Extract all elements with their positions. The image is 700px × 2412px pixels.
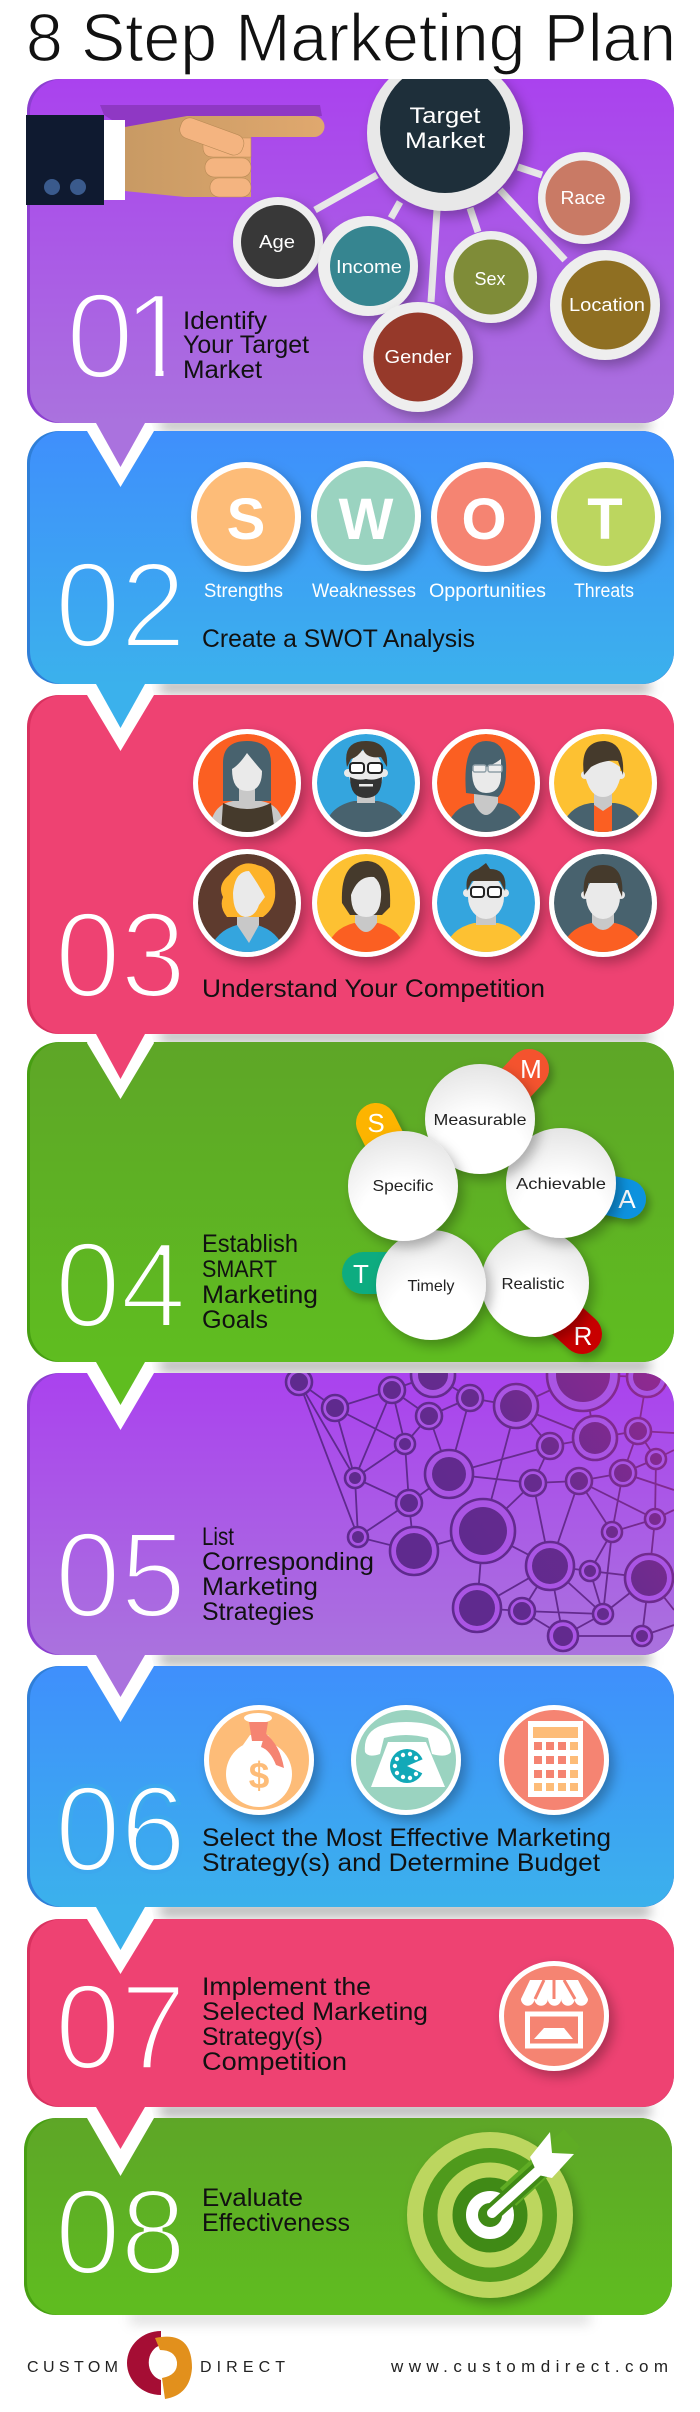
step 06 text bbox=[202, 1824, 611, 1877]
avatar: man with orange shirt and jacket bbox=[549, 729, 657, 837]
pill S bbox=[367, 1108, 392, 1155]
step 05 text bbox=[202, 1523, 374, 1626]
pill S: S bbox=[367, 1108, 385, 1138]
SWOT S: strengths: S bbox=[227, 487, 265, 552]
step number 06: 06 bbox=[55, 1761, 186, 1897]
node Gender: Gender bbox=[384, 347, 452, 367]
icon: pointing hand bbox=[26, 105, 324, 205]
speech tip of step 07 bbox=[87, 2107, 154, 2176]
node Age: Age bbox=[259, 232, 295, 252]
logo mark bbox=[127, 2331, 192, 2399]
hub circle: Target bbox=[410, 103, 480, 128]
step 05 text: Strategies bbox=[202, 1598, 314, 1626]
node Race: Race bbox=[560, 188, 606, 208]
diagram: target market hub bbox=[233, 55, 660, 412]
disc Timely: Timely bbox=[408, 1278, 454, 1295]
avatar: woman with blonde hair bbox=[193, 849, 301, 957]
icon: money bag: $ bbox=[249, 1755, 270, 1796]
step 01 text: Your Target bbox=[183, 331, 309, 359]
step number 08: 08 bbox=[55, 2164, 186, 2300]
speech tip of step 02 bbox=[87, 684, 154, 751]
node Race bbox=[538, 152, 630, 244]
node Sex: Sex bbox=[474, 269, 506, 289]
disc Timely bbox=[376, 1230, 486, 1340]
SWOT T: threats: T bbox=[587, 487, 623, 552]
chart: network graphic bbox=[284, 1373, 674, 1652]
pill R: R bbox=[574, 1321, 592, 1351]
SWOT O: opportunities: Opportunities bbox=[429, 581, 546, 602]
speech tip of step 06 bbox=[87, 1907, 154, 1974]
disc Achievable: Achievable bbox=[516, 1176, 606, 1193]
hub circle bbox=[367, 55, 523, 211]
node Location: Location bbox=[569, 295, 645, 315]
panel: step 08 evaluate effectiveness bbox=[24, 2118, 672, 2315]
pill T bbox=[353, 1259, 400, 1289]
SWOT W: weaknesses: Weaknesses bbox=[312, 581, 416, 602]
connector lines bbox=[315, 167, 565, 302]
speech tip of step 04 bbox=[87, 1362, 154, 1430]
node Income bbox=[318, 216, 418, 316]
pill M: M bbox=[520, 1054, 542, 1084]
step 04 text: SMART bbox=[202, 1256, 277, 1283]
step 01 text: Identify bbox=[183, 307, 268, 335]
panel: step 05 list strategies bbox=[27, 1339, 674, 1722]
step 01 text: Market bbox=[183, 356, 262, 384]
step 03 text: Understand Your Competition bbox=[202, 975, 545, 1003]
logo text DIRECT: DIRECT bbox=[200, 2359, 285, 2376]
step number 01 bbox=[72, 294, 164, 377]
step 04 text: Goals bbox=[202, 1306, 268, 1334]
avatar: woman long hair bbox=[193, 729, 301, 837]
step 05 text: Marketing bbox=[202, 1573, 318, 1601]
icon: calculator bbox=[502, 1708, 606, 1812]
step 06 text: Select the Most Effective Marketing bbox=[202, 1824, 611, 1852]
speech tip of step 01 bbox=[87, 423, 154, 487]
pill A bbox=[585, 1184, 636, 1214]
panel: step 03 competition bbox=[27, 695, 674, 1099]
step 07 text: Competition bbox=[202, 2048, 347, 2076]
disc Realistic: Realistic bbox=[502, 1276, 564, 1293]
footer: website: www.customdirect.com bbox=[390, 2357, 668, 2376]
step 08 text: Evaluate bbox=[202, 2184, 303, 2212]
panel drop shadows bbox=[130, 420, 650, 2324]
logo text CUSTOM: CUSTOM bbox=[27, 2359, 118, 2376]
icon: storefront bbox=[502, 1964, 606, 2068]
avatar: man with glasses and yellow shirt bbox=[432, 849, 540, 957]
step 07 text: Implement the bbox=[202, 1973, 371, 2001]
step number 01: 1 bbox=[123, 268, 191, 404]
panel: step 06 select strategy bbox=[27, 1666, 674, 1974]
step 08 text: Effectiveness bbox=[202, 2209, 350, 2237]
panel: step 04 smart goals bbox=[27, 1042, 674, 1430]
footer: Custom Direct logo bbox=[27, 2331, 285, 2399]
SWOT W: weaknesses bbox=[312, 464, 418, 602]
avatar: bearded man with glasses bbox=[312, 729, 420, 837]
avatar: woman short hair with glasses bbox=[432, 729, 540, 837]
panel: step 02 swot bbox=[27, 431, 674, 751]
node Gender bbox=[363, 302, 473, 412]
SWOT O: opportunities bbox=[429, 465, 546, 602]
disc Realistic bbox=[481, 1229, 589, 1337]
disc Specific: Specific bbox=[372, 1178, 434, 1195]
pill M bbox=[505, 1054, 542, 1095]
panel: step 07 implement bbox=[27, 1919, 674, 2176]
SMART diagram bbox=[348, 1054, 636, 1351]
node Sex bbox=[445, 231, 537, 323]
node Location bbox=[550, 250, 660, 360]
icon: money bag bbox=[206, 1708, 312, 1812]
step number 01: 0 bbox=[66, 268, 134, 404]
speech tip of step 03 bbox=[87, 1034, 154, 1099]
step number 04: 04 bbox=[55, 1217, 186, 1353]
SWOT T: threats: Threats bbox=[574, 581, 634, 602]
step number 05: 05 bbox=[55, 1507, 186, 1643]
step 06 text: Strategy(s) and Determine Budget bbox=[202, 1849, 600, 1877]
icon: rotary telephone bbox=[354, 1708, 458, 1812]
step 02 text: Create a SWOT Analysis bbox=[202, 625, 475, 653]
title: 8 Step Marketing Plan bbox=[26, 0, 676, 76]
pill T: T bbox=[353, 1259, 369, 1289]
avatar: man with slate background bbox=[549, 849, 657, 957]
disc Measurable: Measurable bbox=[434, 1112, 527, 1129]
panel: step 01 target market bbox=[26, 55, 674, 487]
node Income: Income bbox=[336, 257, 402, 277]
step number 02: 02 bbox=[55, 537, 186, 673]
pill R bbox=[550, 1305, 592, 1351]
disc Achievable bbox=[506, 1128, 616, 1238]
speech tip of step 05 bbox=[87, 1655, 154, 1722]
disc Specific bbox=[348, 1131, 458, 1241]
step 04 text bbox=[202, 1230, 318, 1334]
SWOT T: threats bbox=[554, 465, 658, 602]
SWOT S: strengths bbox=[194, 465, 298, 602]
step 07 text: Strategy(s) bbox=[202, 2023, 323, 2051]
step 05 text: Corresponding bbox=[202, 1548, 374, 1576]
avatar: woman with dark wavy hair bbox=[312, 849, 420, 957]
icon: target with arrow bbox=[415, 2132, 574, 2290]
step 01 text bbox=[183, 307, 309, 384]
SWOT O: opportunities: O bbox=[461, 487, 507, 552]
pill A: A bbox=[618, 1184, 636, 1214]
step 04 text: Marketing bbox=[202, 1281, 318, 1309]
step number 07: 07 bbox=[55, 1959, 186, 2095]
step 07 text bbox=[202, 1973, 428, 2076]
SWOT W: weaknesses: W bbox=[339, 487, 394, 552]
step number 03: 03 bbox=[55, 887, 186, 1023]
disc Measurable bbox=[425, 1064, 535, 1174]
hub circle: Market bbox=[405, 128, 485, 153]
step 07 text: Selected Marketing bbox=[202, 1998, 428, 2026]
step 04 text: Establish bbox=[202, 1230, 298, 1258]
node Age bbox=[233, 197, 323, 287]
step 08 text bbox=[202, 2184, 350, 2237]
SWOT S: strengths: Strengths bbox=[204, 581, 283, 602]
step 05 text: List bbox=[202, 1523, 234, 1551]
